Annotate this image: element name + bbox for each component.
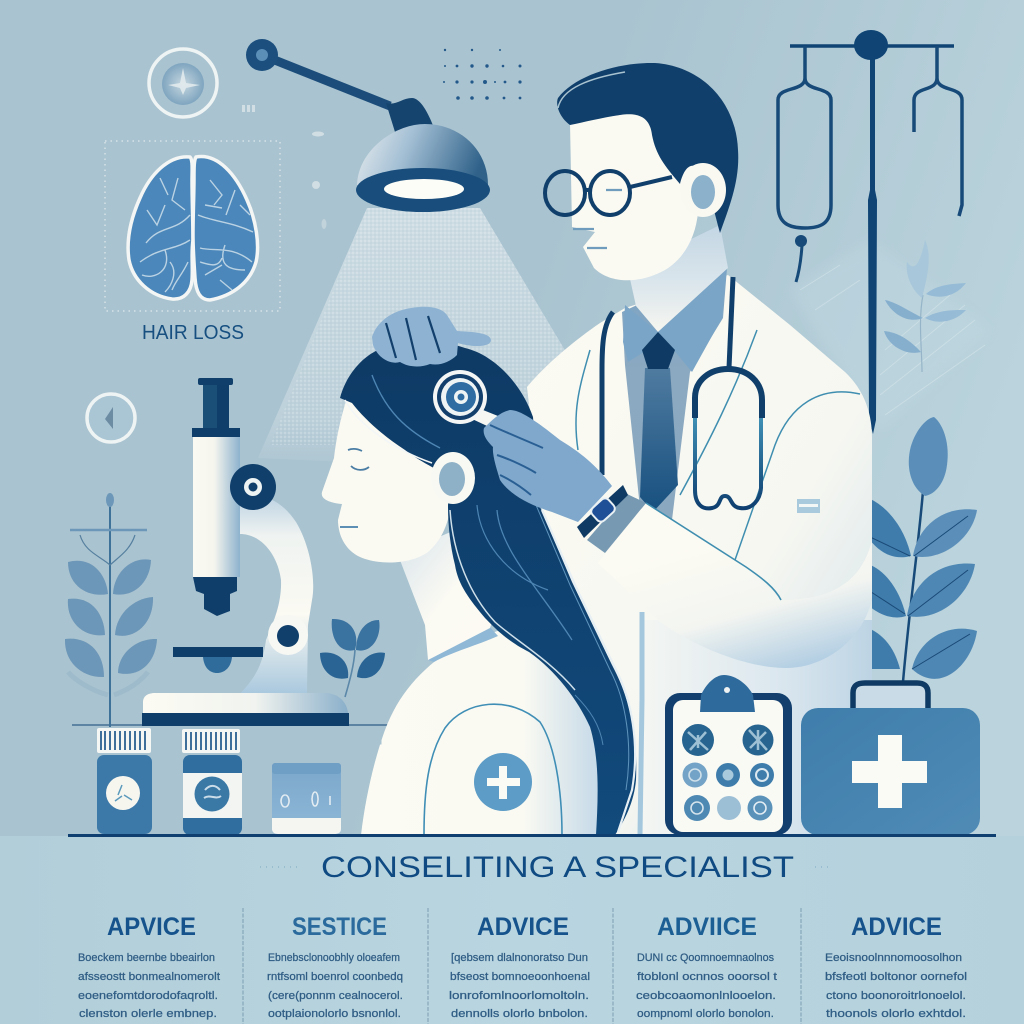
advice column 3: [qebsem dlalnonoratso Dun <box>451 952 588 964</box>
IV knob <box>795 235 807 247</box>
wristwatch <box>577 485 628 538</box>
advice column 2: ootplaionolorlo bsnonlol. <box>268 1008 401 1020</box>
bag cross <box>852 735 927 808</box>
upper shelf line <box>72 724 396 726</box>
stethoscope <box>602 277 762 508</box>
brain veins <box>140 178 253 292</box>
coat pin <box>797 499 820 513</box>
patient hair <box>340 341 636 835</box>
microscope base <box>142 693 349 726</box>
patient ear <box>431 452 475 504</box>
sleeve <box>598 503 872 668</box>
advice column 3: lonrofomlnoorlomoltoln. <box>449 990 589 1002</box>
main shelf line <box>68 834 996 837</box>
clipboard circle chart <box>682 724 774 821</box>
advice column 1 <box>78 913 220 1020</box>
light beam <box>258 208 566 470</box>
doctor eye, nose and mouth <box>573 190 622 248</box>
doctor hand on head <box>372 307 491 366</box>
lamp pivot knob <box>246 39 278 71</box>
faded plant <box>790 240 990 430</box>
advice column 3: dennolls olorlo bnbolon. <box>451 1008 588 1020</box>
doctor tie <box>640 332 678 512</box>
focus knob <box>230 464 276 510</box>
advice column 5: Eeoisnoolnnnomoosolhon <box>825 952 962 964</box>
plant left <box>65 493 157 727</box>
small floating marks <box>242 105 326 229</box>
advice column 4: ceobcoaomonlnlooelon. <box>636 990 776 1002</box>
IV cross bar <box>790 44 954 48</box>
advice column 2 <box>267 913 403 1020</box>
lamp arm <box>262 55 390 106</box>
bag handle <box>853 683 928 710</box>
advice column 5: thoonols olorlo exhtdol. <box>826 1008 966 1020</box>
hand <box>484 410 612 522</box>
microscope <box>142 378 349 726</box>
advice column 2: Ebnebsclonoobhly oloeafem <box>268 952 400 964</box>
doctor shirt <box>622 268 727 520</box>
advice column 3 <box>449 913 590 1020</box>
stage <box>173 647 263 673</box>
advice column 5: ADVICE <box>851 913 942 941</box>
plus badge <box>474 753 532 811</box>
objective lens <box>193 577 237 616</box>
doctor neck <box>628 225 728 332</box>
shoulder arc <box>424 704 562 835</box>
advice column 2: SESTICE <box>292 913 387 941</box>
doctor ear <box>680 163 726 217</box>
patient face <box>322 395 452 562</box>
medical bag <box>801 683 980 835</box>
IV pole <box>868 45 877 434</box>
doctor face <box>570 112 704 280</box>
hair highlights <box>345 375 635 832</box>
brain right hemisphere <box>193 157 258 300</box>
lamp dome <box>357 124 488 185</box>
clipboard <box>665 675 792 835</box>
eyepiece <box>192 378 240 437</box>
ceiling lamp <box>246 39 490 212</box>
doctor hair <box>557 63 738 233</box>
patient <box>322 341 636 835</box>
advice column 1: APVICE <box>107 913 196 941</box>
advice column 5 <box>825 913 967 1020</box>
right IV hook outline <box>914 46 962 216</box>
jar <box>272 763 341 834</box>
advice column 2: rntfsoml boenrol coonbedq <box>267 971 403 983</box>
lamp neck <box>386 98 434 132</box>
advice column 3: bfseost bomnoeoonhoenal <box>450 971 590 983</box>
advice column 1: afsseostt bonmealnomerolt <box>78 971 220 983</box>
bag body <box>801 708 980 835</box>
doctor sleeve and gloved hand <box>484 410 872 668</box>
brain left hemisphere <box>128 157 193 299</box>
label: hair loss: HAIR LOSS <box>142 322 244 344</box>
coat lapel lines <box>576 330 860 560</box>
advice column 4 <box>636 913 777 1020</box>
advice column 3: ADVICE <box>477 913 569 941</box>
title: CONSELITING A SPECIALIST <box>321 851 794 884</box>
column dividers <box>243 908 801 1024</box>
lower knob <box>268 615 308 655</box>
cuff <box>587 494 646 553</box>
patient shoulder <box>361 630 600 835</box>
advice column 1: eoenefomtdorodofaqroltl. <box>78 990 218 1002</box>
doctor <box>527 63 872 835</box>
IV hub <box>854 30 888 60</box>
sleeve edge line <box>646 503 781 600</box>
lamp rim <box>356 168 490 212</box>
coat seam <box>640 612 642 835</box>
advice column 4: DUNI cc Qoomnoemnaolnos <box>637 952 774 964</box>
advice column 2: (cere(ponnm cealnocerol. <box>268 990 403 1002</box>
doctor glasses <box>545 171 672 215</box>
advice column 1: Boeckem beernbe bbeairlon <box>78 952 215 964</box>
advice column 5: ctono boonoroitrlonoelol. <box>826 990 966 1002</box>
advice column 4: oompnoml olorlo bonolon. <box>637 1008 774 1020</box>
patient neck <box>398 530 500 660</box>
plant right <box>866 417 977 682</box>
microscope tube <box>193 437 240 577</box>
bottle two <box>182 729 242 835</box>
examination probe <box>433 370 508 432</box>
left IV bag outline <box>778 46 831 282</box>
plant small <box>320 619 385 697</box>
IV stand <box>778 30 962 434</box>
advice column 1: clenston olerle embnep. <box>79 1008 217 1020</box>
advice column 4: ftoblonl ocnnos ooorsol t <box>637 971 777 983</box>
patient mouth <box>340 526 358 528</box>
icon: round dial left <box>87 394 135 442</box>
advice column 5: bfsfeotl boltonor oornefol <box>825 971 967 983</box>
patient eye and brow <box>348 449 369 470</box>
icon: round dial top left <box>149 49 217 117</box>
advice column 4: ADVIICE <box>657 913 757 941</box>
dotted dot grid <box>443 49 522 100</box>
doctor coat <box>527 275 872 835</box>
patient collar <box>428 625 498 662</box>
lamp bulb <box>384 179 464 199</box>
brain illustration with dotted frame <box>105 141 280 311</box>
microscope arm <box>240 496 313 694</box>
clipboard clip <box>700 675 755 712</box>
bottle one <box>97 728 152 834</box>
